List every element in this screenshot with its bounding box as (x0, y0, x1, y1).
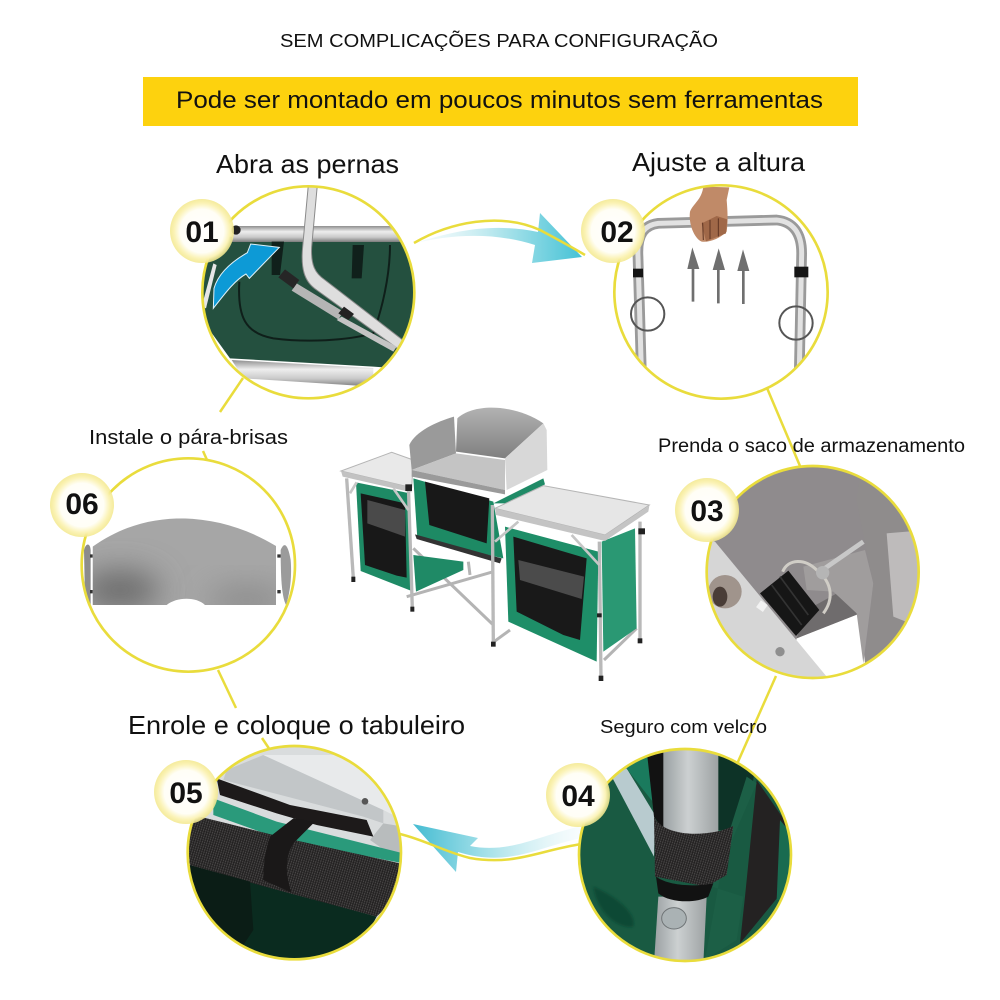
badge: 04: 04 (561, 780, 595, 813)
badge: 02: 02 (600, 216, 634, 249)
photo: step 5 rolled mesh (183, 743, 410, 967)
step 1: abra as pernas (170, 149, 427, 407)
badge: 02 (581, 199, 645, 263)
step 3: prenda o saco (658, 436, 965, 687)
label: step 6: Instale o pára-brisas (89, 427, 288, 449)
label: step 1: Abra as pernas (216, 149, 399, 179)
center: folding camp kitchen table (341, 408, 649, 681)
arrow: step 1 to step 2 (412, 213, 585, 263)
photo: step 2 raising frame (613, 184, 829, 400)
photo: step 1 leg (201, 185, 416, 400)
green strip behind (493, 478, 545, 503)
center cabinet (413, 478, 503, 558)
windscreen (409, 408, 547, 494)
badge: 01 (170, 199, 234, 263)
step 6: instale o para-brisas (50, 427, 300, 677)
right table top (495, 486, 649, 535)
badge: 05 (154, 760, 218, 824)
label: step 5: Enrole e coloque o tabuleiro (128, 710, 465, 740)
badge: 01: 01 (185, 216, 219, 249)
photo: step 4 velcro strap (573, 743, 800, 967)
step 5: enrole e coloque (128, 710, 465, 967)
feet (351, 484, 645, 681)
banner: yellow headline (143, 77, 858, 126)
badge: 03 (675, 478, 739, 542)
left table top (341, 452, 413, 488)
step 4: seguro com velcro (546, 717, 800, 967)
label: step 3: Prenda o saco de armazenamento (658, 436, 965, 457)
photo: step 6 windscreen (73, 453, 300, 677)
label: step 4: Seguro com velcro (600, 717, 767, 737)
left cabinet (356, 482, 412, 591)
brace struts (350, 482, 599, 565)
right cabinet (505, 527, 598, 662)
badge: 06: 06 (65, 488, 99, 521)
title: SEM COMPLICAÇÕES PARA CONFIGURAÇÃO (280, 30, 718, 51)
lower frame (407, 548, 637, 660)
legs (347, 478, 640, 678)
badge: 03: 03 (690, 495, 724, 528)
arrow: step 4 to step 5 (400, 824, 582, 872)
badge: 04 (546, 763, 610, 827)
photo: step 3 carabiner strap (705, 464, 920, 680)
label: step 2: Ajuste a altura (632, 147, 806, 177)
banner: yellow headline: Pode ser montado em poucos minutos sem ferramentas (176, 87, 823, 114)
step 2: ajuste a altura (581, 147, 837, 407)
badge: 06 (50, 473, 114, 537)
badge: 05: 05 (169, 777, 203, 810)
connector lines between steps (203, 378, 800, 764)
